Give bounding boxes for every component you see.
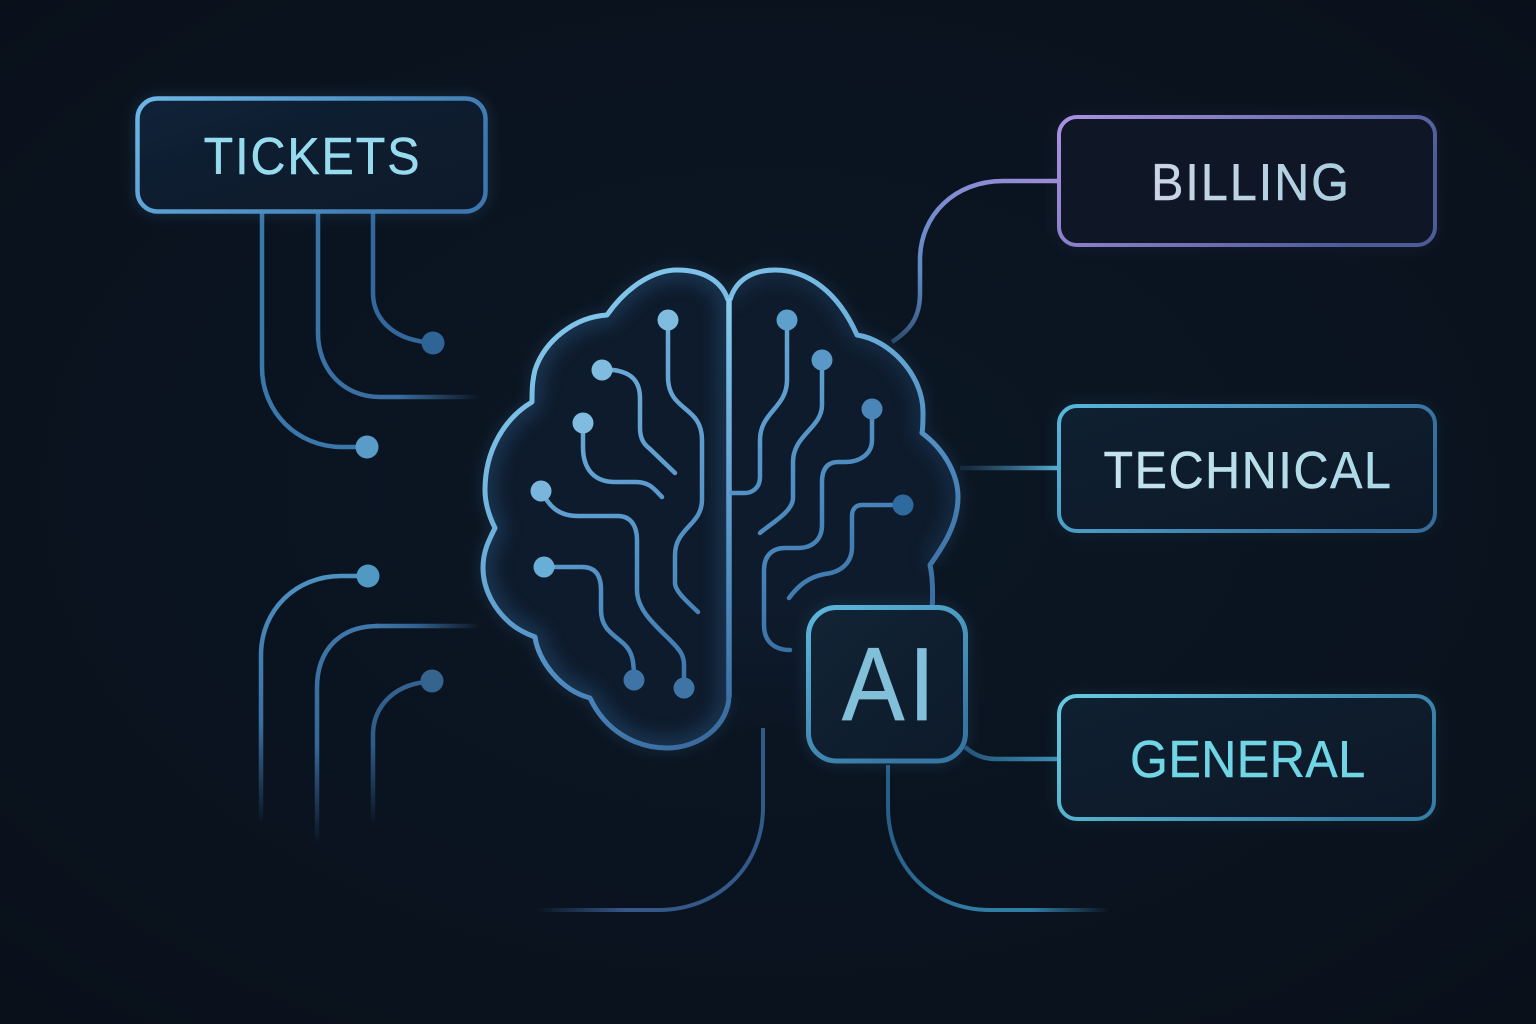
right hemisphere fill bbox=[730, 270, 958, 730]
node: upper left middle bbox=[356, 436, 378, 458]
brain bbox=[483, 270, 958, 748]
right hemisphere outline bbox=[730, 270, 958, 612]
node: lower left lower bbox=[420, 670, 444, 692]
AI label: AI bbox=[842, 625, 939, 742]
node: upper left top bbox=[422, 332, 444, 354]
connector: brain to technical bbox=[960, 466, 1060, 470]
brain halo bbox=[483, 270, 958, 748]
tickets box bbox=[138, 98, 486, 212]
billing label: BILLING bbox=[1151, 153, 1351, 211]
left hemisphere outline bbox=[483, 270, 729, 748]
tickets label: TICKETS bbox=[204, 127, 421, 185]
node: lower left upper bbox=[356, 564, 380, 588]
left circuits bbox=[542, 320, 702, 688]
billing box bbox=[1059, 117, 1435, 245]
circuit nodes bbox=[530, 310, 914, 698]
right inner glow bbox=[730, 270, 958, 565]
connector: brain to billing bbox=[892, 181, 1059, 342]
connector: lower right output bbox=[888, 765, 1110, 910]
central divider bbox=[726, 298, 732, 697]
AI chip bbox=[808, 608, 966, 761]
left hemisphere fill bbox=[483, 270, 729, 748]
input lines: lower connectors bbox=[261, 564, 480, 848]
general label: GENERAL bbox=[1130, 730, 1366, 788]
technical box bbox=[1059, 406, 1435, 531]
general box bbox=[1059, 696, 1434, 819]
input lines: upper tickets connectors bbox=[262, 212, 480, 458]
right hemisphere upper fill bbox=[730, 270, 958, 600]
connector: AI to general bbox=[965, 747, 1060, 759]
connector: lower left output bbox=[535, 728, 763, 910]
right circuits bbox=[731, 320, 903, 650]
technical label: TECHNICAL bbox=[1103, 441, 1393, 499]
left inner glow bbox=[483, 270, 729, 748]
